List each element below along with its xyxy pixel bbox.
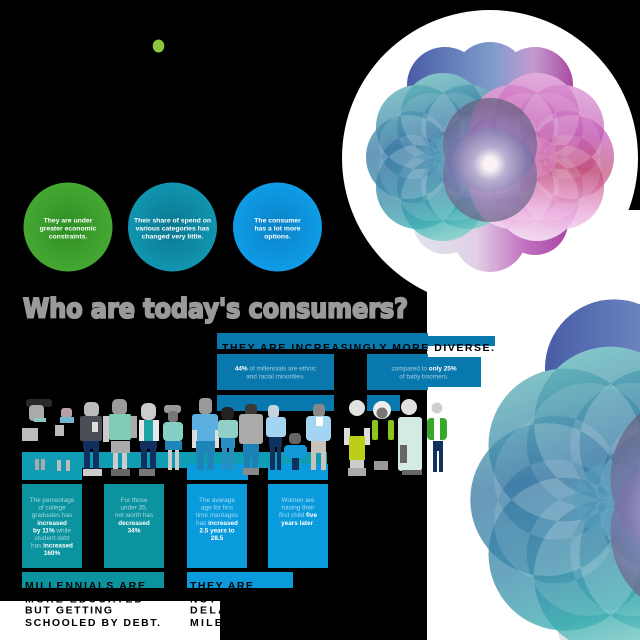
stat box: college graduates: of college <box>38 505 66 512</box>
bubble: more options: The consumer <box>254 218 301 224</box>
stat box: only 25% of baby boomers: compared to only 25% <box>391 366 457 372</box>
stat box: first marriages: 2.5 years to <box>199 527 235 534</box>
stat box: first child: Women are <box>282 497 315 504</box>
bubble: share of spend: various categories has <box>136 226 210 232</box>
icon: small green dot <box>153 40 164 52</box>
figure: man in grey jacket <box>239 404 263 475</box>
stat box: only 25% of baby boomers <box>367 354 481 390</box>
figure: child <box>284 433 307 470</box>
icon: overlapping circles sphere, top <box>366 42 614 272</box>
stat box: net worth <box>104 484 164 568</box>
figure: person in mint coat <box>398 399 422 475</box>
figure: woman in green jacket <box>427 402 447 472</box>
heading: delaying milestones: NOT RUSHING, <box>190 594 285 606</box>
figure: man in grey shirt <box>80 402 102 476</box>
stat box: college graduates: has increased <box>31 543 73 550</box>
stat box: first marriages: time marriages <box>196 512 238 519</box>
icon: overlapping circles sphere, bottom right <box>465 285 640 640</box>
stat box: first marriages: The average <box>199 497 235 504</box>
heading: millennials: SCHOOLED BY DEBT. <box>25 617 160 629</box>
stat box: college graduates: increased <box>37 520 67 527</box>
figure: woman with glasses <box>55 408 74 471</box>
white lower left strip <box>0 601 222 640</box>
figure: man in mint shirt <box>103 399 137 476</box>
bubble: economic constraints <box>24 182 112 272</box>
bubble: economic constraints: constraints. <box>49 234 87 240</box>
black mask over lower centre <box>220 590 427 640</box>
figure: person with green sleeves <box>372 401 394 470</box>
stat box: net worth: under 35, <box>120 505 148 512</box>
bubble: share of spend: changed very little. <box>142 234 203 240</box>
bubble: share of spend <box>128 182 217 272</box>
stat box: first child: years later. <box>281 520 315 527</box>
stat box: college graduates: The percentage <box>30 497 75 504</box>
stat box: first marriages: age for first <box>201 505 233 512</box>
bubble: economic constraints: greater economic <box>40 226 97 232</box>
heading: delaying milestones: DELAYING <box>190 604 260 616</box>
heading: millennials: MILLENNIALS ARE <box>25 580 145 592</box>
stat box: college graduates: student debt <box>34 535 70 542</box>
figure: woman with teal vest <box>139 403 159 476</box>
bubble: share of spend: Their share of spend on <box>134 218 211 224</box>
white lower right panel <box>427 210 640 640</box>
diverse heading band <box>217 333 495 354</box>
stat box: only 25% of baby boomers: of baby boomers. <box>399 374 449 380</box>
stat box: net worth: decreased <box>118 520 150 527</box>
figure: woman in lime skirt <box>344 400 370 476</box>
stat box: college graduates <box>22 484 82 568</box>
blue strips behind figures <box>217 395 400 411</box>
stat box: 44% of millennials: and racial minorities. <box>246 374 305 380</box>
stat box: college graduates: 160% <box>44 550 60 557</box>
stat box: college graduates: by 11% while <box>33 527 71 534</box>
bubble: more options: has a lot more <box>254 226 301 232</box>
heading: millennials <box>22 572 164 629</box>
stat box: first child: having their <box>281 505 315 512</box>
stat box: net worth: For those <box>120 497 148 504</box>
figure: man in light blue jacket <box>306 404 331 470</box>
heading: delaying milestones: THEY ARE <box>190 580 253 592</box>
figure: graduate <box>22 399 52 470</box>
stat box: college graduates: graduates has <box>32 512 72 519</box>
stat box: 44% of millennials: 44% of millennials are ethnic <box>235 366 317 372</box>
stat box: 44% of millennials <box>217 354 334 390</box>
white circle backdrop <box>342 10 638 306</box>
stat box: first marriages <box>187 484 247 568</box>
stat box: net worth: net worth has <box>115 512 153 519</box>
figure: woman with dark hair <box>218 407 238 470</box>
diverse heading band: THEY ARE INCREASINGLY MORE DIVERSE. <box>222 342 494 354</box>
figure: woman in shorts <box>163 405 183 470</box>
heading: delaying milestones <box>187 572 293 629</box>
stat box: net worth: 34% <box>128 527 141 534</box>
stat box: first marriages: 28.5 <box>211 535 224 542</box>
title: Who are today's consumers? <box>23 294 408 324</box>
stat box: first marriages: has increased <box>196 520 238 527</box>
bubble: more options: options. <box>264 234 291 240</box>
heading: delaying milestones: MILESTONES <box>190 617 278 629</box>
bubble: economic constraints: They are under <box>44 218 93 224</box>
figure: man in blue shirt <box>192 398 219 470</box>
heading: millennials: MORE EDUCATED <box>25 594 142 606</box>
stat box: first child: first child five <box>279 512 317 519</box>
bubble: more options <box>233 182 322 272</box>
stat box: first child <box>268 484 328 568</box>
figure: woman in light blue <box>266 405 286 470</box>
teal and blue platform <box>22 452 328 480</box>
heading: millennials: BUT GETTING <box>25 604 112 616</box>
